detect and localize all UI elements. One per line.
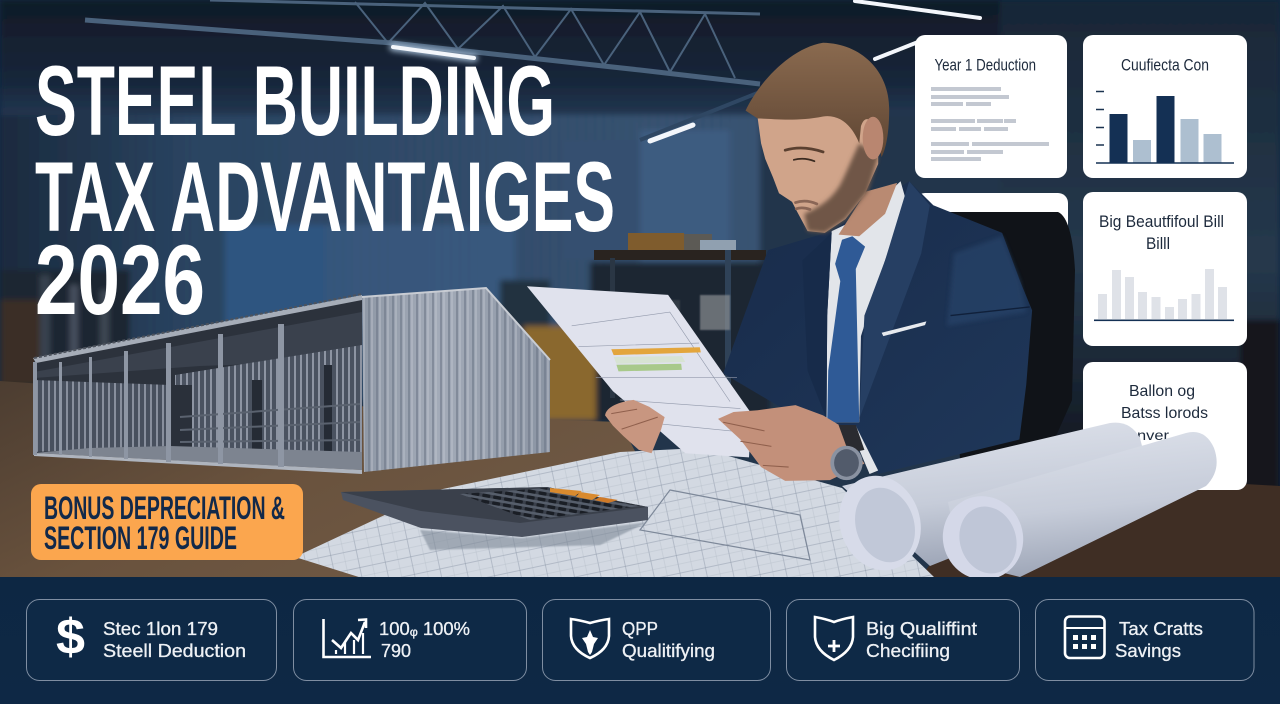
face xyxy=(758,111,878,233)
title: TAX ADVANTAIGES xyxy=(35,141,615,252)
beard xyxy=(804,143,878,233)
roof edge xyxy=(33,295,362,363)
pill text: Tax Cratts xyxy=(1119,619,1203,639)
reading sheet xyxy=(527,286,751,457)
pill: QPP xyxy=(542,600,770,680)
pill: 100% xyxy=(294,600,526,680)
orange subtitle badge: SECTION 179 GUIDE xyxy=(44,520,237,556)
card heading: Cuufiecta Con xyxy=(1121,56,1209,74)
pill text: 100ᵩ 100% xyxy=(379,619,470,639)
calculator xyxy=(341,487,648,550)
card: year 1 deduction xyxy=(915,35,1067,178)
pill text: Qualitifying xyxy=(622,641,715,661)
placeholder text lines xyxy=(931,87,1049,161)
right hand xyxy=(718,405,864,481)
pill text: 790 xyxy=(381,641,411,661)
shirt cuff xyxy=(851,426,878,474)
mustache and lips xyxy=(796,201,817,209)
office chair xyxy=(950,212,1075,460)
title: STEEL BUILDING xyxy=(35,45,555,156)
orange subtitle badge xyxy=(31,484,303,560)
neck xyxy=(839,183,897,236)
jacket xyxy=(723,181,1032,474)
pill: section 179 xyxy=(26,600,276,680)
pill: tax credits xyxy=(1036,600,1254,680)
shirt xyxy=(827,181,906,422)
front posts xyxy=(33,324,284,467)
orange subtitle badge: BONUS DEPRECIATION & xyxy=(44,490,285,526)
pill text xyxy=(103,619,246,661)
bar chart xyxy=(1096,92,1234,163)
sleeve highlight xyxy=(947,236,1026,326)
shelving with stock xyxy=(594,233,766,420)
pill text xyxy=(866,619,977,661)
icon: dollar sign: $ xyxy=(56,609,85,665)
pill text: Checifiing xyxy=(866,641,950,661)
pill text: QPP xyxy=(622,619,658,639)
card heading: Big Beautfifoul Bill xyxy=(1099,212,1224,231)
ceiling trusses xyxy=(85,0,760,140)
pill text: Stec 1lon 179 xyxy=(103,619,218,639)
corrugated end wall xyxy=(362,288,550,472)
pill text: Savings xyxy=(1115,641,1181,661)
hair xyxy=(746,43,889,157)
tie xyxy=(827,236,865,422)
brow and eye xyxy=(785,148,823,152)
pocket square xyxy=(882,321,926,336)
icon: rising chart xyxy=(324,619,371,657)
table surface xyxy=(0,381,1280,578)
left hand xyxy=(605,400,665,453)
pale bar chart xyxy=(1094,269,1234,321)
title: 2026 xyxy=(35,224,205,335)
icon: shield with plus xyxy=(815,617,853,660)
card: bar chart xyxy=(1083,35,1247,178)
title xyxy=(35,45,615,335)
icon: shield with star xyxy=(571,619,609,658)
highlighted rows xyxy=(611,347,701,355)
lapels xyxy=(859,181,930,419)
card: balloon details: nver xyxy=(1137,427,1169,443)
bottom navy band xyxy=(0,577,1280,704)
pill text: Big Qualiffint xyxy=(866,619,977,639)
card heading: Year 1 Deduction xyxy=(934,56,1036,74)
watch xyxy=(830,425,864,480)
pill: big qualifying xyxy=(786,600,1020,680)
card: big beautiful bill xyxy=(1083,192,1247,346)
ear xyxy=(863,117,883,160)
card: big beautiful bill: Billl xyxy=(1146,234,1170,253)
card: balloon details: Batss lorods xyxy=(1121,405,1208,422)
businessman xyxy=(527,43,1032,481)
blueprint rolls xyxy=(827,423,1217,590)
steel building model xyxy=(33,288,550,474)
card: balloon details xyxy=(1083,362,1247,490)
partly hidden card xyxy=(915,193,1068,253)
pill text xyxy=(1115,619,1203,661)
roll two xyxy=(932,432,1217,590)
roll one xyxy=(827,423,1150,581)
pill text xyxy=(622,619,715,661)
icon: calculator xyxy=(1065,616,1104,658)
building interior xyxy=(34,297,362,470)
pill text xyxy=(379,619,470,661)
card text: Ballon og xyxy=(1129,383,1195,400)
ceiling lights xyxy=(393,1,980,141)
pill text: Steell Deduction xyxy=(103,641,246,661)
blueprint sheet on table xyxy=(295,448,935,578)
